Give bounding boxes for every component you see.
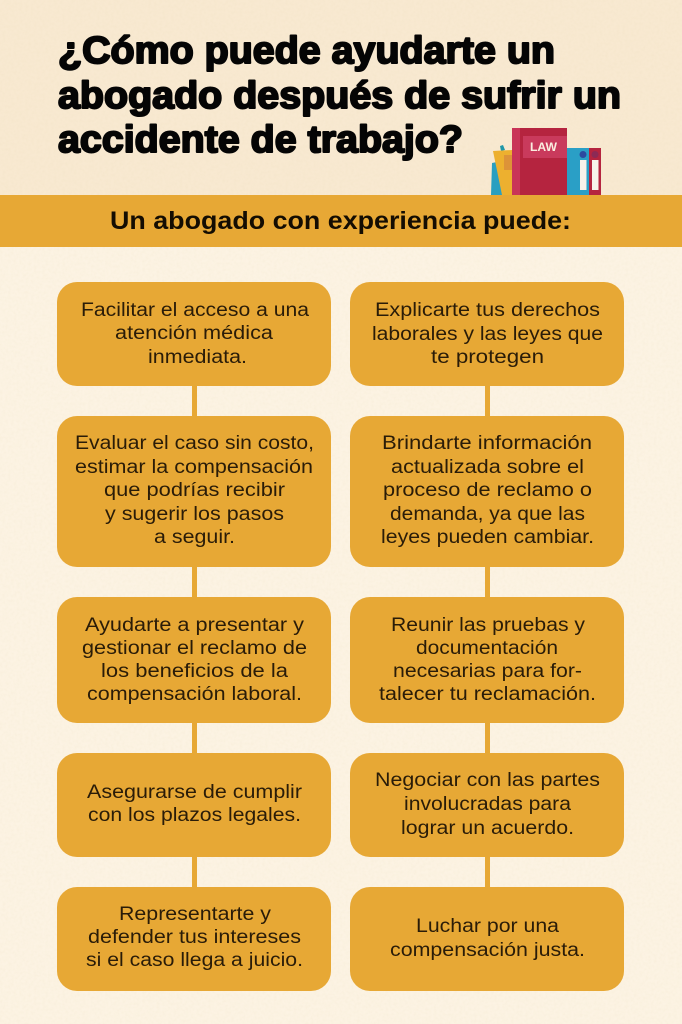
card: derechos laborales: [350, 282, 624, 386]
card: compensación justa: Luchar por una: [416, 916, 559, 937]
card: reunir pruebas: documentación: [416, 638, 558, 659]
card: información actualizada: leyes pueden cambiar.: [381, 527, 594, 548]
card: derechos laborales: Explicarte tus derechos: [375, 300, 600, 321]
title: abogado después de sufrir un: [58, 75, 621, 117]
card: atención médica: [57, 282, 331, 386]
card: representarte: si el caso llega a juicio.: [86, 950, 303, 971]
title: accidente de trabajo?: [58, 119, 463, 161]
card: evaluar el caso: [57, 416, 331, 567]
card: presentar el reclamo: los beneficios de la: [101, 661, 288, 682]
card: evaluar el caso: a seguir.: [154, 527, 235, 548]
card: negociar: Negociar con las partes: [375, 770, 600, 791]
card: información actualizada: actualizada sobre el: [391, 457, 584, 478]
card: atención médica: inmediata.: [148, 347, 247, 368]
card: reunir pruebas: [350, 597, 624, 723]
card: información actualizada: proceso de reclamo o: [383, 480, 592, 501]
card: atención médica: Facilitar el acceso a una: [81, 300, 309, 321]
card: evaluar el caso: Evaluar el caso sin costo,: [75, 433, 314, 454]
icon: law books: [491, 128, 601, 195]
banner: [0, 195, 682, 247]
connector: right column: [485, 386, 490, 887]
connector: left column: [192, 386, 197, 887]
card: atención médica: atención médica: [115, 323, 273, 344]
card: plazos legales: Asegurarse de cumplir: [87, 782, 303, 803]
card: representarte: defender tus intereses: [88, 927, 301, 948]
card: derechos laborales: te protegen: [431, 347, 544, 368]
card: evaluar el caso: que podrías recibir: [104, 480, 286, 501]
card: información actualizada: Brindarte información: [382, 433, 592, 454]
card: negociar: involucradas para: [404, 794, 571, 815]
card: reunir pruebas: talecer tu reclamación.: [379, 684, 596, 705]
card: información actualizada: demanda, ya que las: [390, 504, 585, 525]
card: representarte: Representarte y: [119, 904, 272, 925]
card: compensación justa: [350, 887, 624, 991]
banner: Un abogado con experiencia puede:: [110, 207, 571, 235]
card: reunir pruebas: necesarias para for-: [393, 661, 582, 682]
card: representarte: [57, 887, 331, 991]
card: negociar: [350, 753, 624, 857]
card: presentar el reclamo: compensación laboral.: [87, 684, 302, 705]
card: reunir pruebas: Reunir las pruebas y: [391, 615, 586, 636]
card: negociar: lograr un acuerdo.: [401, 818, 574, 839]
title: ¿Cómo puede ayudarte un: [58, 30, 555, 72]
card: evaluar el caso: estimar la compensación: [75, 457, 313, 478]
card: plazos legales: con los plazos legales.: [88, 805, 301, 826]
card: derechos laborales: laborales y las leyes que: [372, 324, 603, 345]
title: [58, 30, 621, 161]
card: evaluar el caso: y sugerir los pasos: [105, 504, 284, 525]
card: plazos legales: [57, 753, 331, 857]
card: compensación justa: compensación justa.: [390, 940, 585, 961]
icon: law books: LAW: [530, 142, 557, 154]
card: presentar el reclamo: Ayudarte a presentar y: [85, 615, 305, 636]
card: información actualizada: [350, 416, 624, 567]
card: presentar el reclamo: gestionar el reclamo de: [82, 638, 307, 659]
card: presentar el reclamo: [57, 597, 331, 723]
